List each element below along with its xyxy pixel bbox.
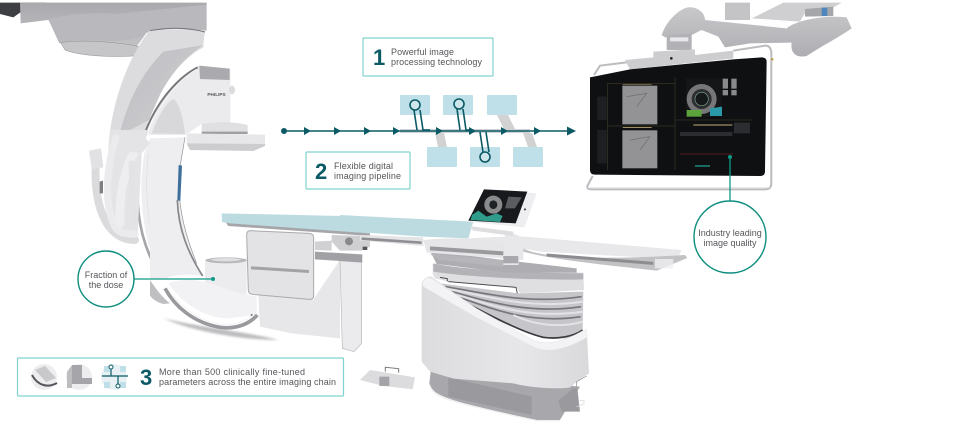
tablet: [468, 189, 537, 228]
lower base: [429, 372, 580, 420]
detector plate: [187, 133, 265, 151]
side panel: [247, 231, 314, 299]
box 1: powerful image processing technology: 1: [373, 45, 385, 70]
box 2: flexible digital imaging pipeline: 2: [315, 159, 327, 184]
ceiling monitor: [587, 3, 852, 189]
box 1: powerful image processing technology: Powerful image: [391, 47, 454, 57]
rail hardware: [315, 241, 332, 251]
box 3: more than 500 parameters: [18, 358, 344, 396]
box 2: flexible digital imaging pipeline: [306, 152, 410, 189]
screen data: [693, 124, 732, 126]
box 1: powerful image processing technology: [363, 38, 493, 76]
pedestal body: [422, 277, 589, 388]
box 3: more than 500 parameters: parameters across the entire imaging chain: [159, 377, 336, 387]
grey branches: [400, 129, 530, 133]
C-arc body: [141, 137, 197, 263]
C-arc body lower: [150, 200, 203, 278]
monitor suspension: [662, 3, 852, 57]
pedestal top: [433, 264, 584, 293]
arm and detector: [108, 28, 248, 150]
patient table: [340, 189, 687, 421]
C-arc lower: [150, 200, 370, 352]
foot pedal: [360, 370, 415, 389]
monitor mount: [625, 49, 733, 69]
icon: pipeline: [101, 364, 128, 390]
rail left: [360, 235, 423, 246]
callout: fraction of the dose: [78, 251, 215, 307]
imaging pipeline diagram: [281, 95, 576, 167]
C-arc upper and cables: [89, 130, 265, 263]
C-arm system: [0, 3, 370, 352]
table top teal left: [226, 223, 370, 236]
box 3: more than 500 parameters: 3: [140, 365, 152, 390]
PHILIPS logo: PHILIPS: [207, 92, 226, 97]
monitor handle: [587, 46, 771, 189]
angiography images: [622, 86, 657, 124]
callout: industry leading image quality: Industry leading: [698, 228, 762, 238]
cables: [105, 130, 148, 233]
box 2: flexible digital imaging pipeline: Flexible digital: [334, 161, 393, 171]
arm: [108, 30, 205, 150]
box 3: more than 500 parameters: More than 500 clinically fine-tuned: [159, 367, 305, 377]
tablet arm: [503, 230, 525, 265]
table support: [258, 260, 340, 338]
callout: fraction of the dose: Fraction of: [85, 270, 128, 280]
box 1: powerful image processing technology: processing technology: [391, 57, 482, 67]
brake pedal: [558, 388, 580, 412]
box 2: flexible digital imaging pipeline: imaging pipeline: [334, 171, 401, 181]
callout: fraction of the dose: the dose: [89, 280, 123, 290]
x-ray tube: [205, 258, 247, 295]
ceiling mount: [0, 3, 207, 56]
detector body: [148, 66, 230, 135]
main line: [284, 130, 570, 132]
table top right: [468, 237, 682, 259]
table top teal: [340, 215, 473, 238]
IVUS image: [686, 78, 722, 117]
bellows: [440, 283, 583, 338]
arrowheads: [304, 126, 576, 136]
icon: detector: [66, 364, 92, 390]
monitor screen: [590, 57, 767, 176]
icon: c-arc: [31, 364, 57, 390]
callout: industry leading image quality: [694, 155, 766, 273]
filter blocks: [400, 95, 543, 167]
callout: industry leading image quality: image quality: [703, 238, 757, 248]
floor shadow: [163, 318, 278, 340]
dark connectors: [414, 109, 489, 152]
